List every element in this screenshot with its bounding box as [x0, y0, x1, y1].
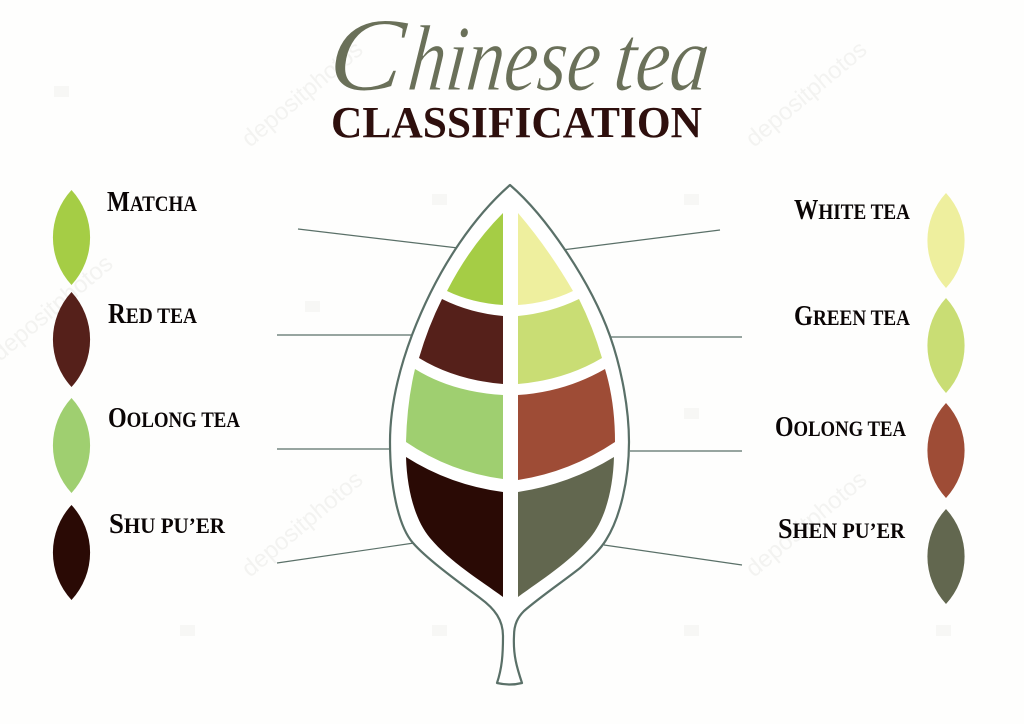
title: Chinese tea: tea	[610, 7, 715, 111]
segment: red tea	[419, 299, 503, 384]
legend: shen pu'er	[778, 509, 965, 604]
legend: shu pu'er	[53, 505, 226, 600]
legend: red tea: RED TEA	[108, 299, 197, 330]
text: depositphotos	[237, 466, 368, 583]
legend: green tea	[794, 298, 965, 393]
segment: shen pu'er	[518, 457, 614, 597]
central leaf diagram	[390, 185, 629, 684]
legend: white tea: WHITE TEA	[794, 195, 910, 226]
legend: white tea	[794, 193, 965, 288]
title: Chinese tea	[324, 0, 715, 113]
leaf outline	[390, 185, 629, 684]
title: Chinese tea: hinese	[404, 7, 607, 111]
legend: oolong tea (right): OOLONG TEA	[775, 412, 906, 443]
left pointer lines	[277, 229, 458, 563]
legend: oolong tea (left): OOLONG TEA	[108, 403, 240, 434]
right pointer lines	[562, 230, 742, 565]
segment: shu pu'er	[406, 457, 503, 597]
legend: oolong tea (right)	[775, 403, 965, 498]
text: depositphotos	[741, 36, 872, 153]
legend: shu pu'er: SHU PU’ER	[109, 509, 226, 540]
segment: green tea	[518, 299, 602, 384]
segment: oolong tea light	[406, 369, 503, 479]
legend: matcha: MATCHA	[107, 187, 197, 218]
text: depositphotos	[741, 466, 872, 583]
legend: shen pu'er: SHEN PU’ER	[778, 514, 906, 545]
subtitle: classification: CLASSIFICATION	[331, 98, 702, 147]
text: depositphotos	[237, 36, 368, 153]
legend: oolong tea (left)	[53, 398, 240, 493]
segment: matcha	[447, 213, 503, 305]
segment: oolong tea rust	[518, 369, 615, 480]
segment: white tea	[518, 213, 573, 305]
legend: green tea: GREEN TEA	[794, 301, 910, 332]
legend: red tea	[53, 292, 197, 387]
legend: matcha	[53, 187, 197, 285]
